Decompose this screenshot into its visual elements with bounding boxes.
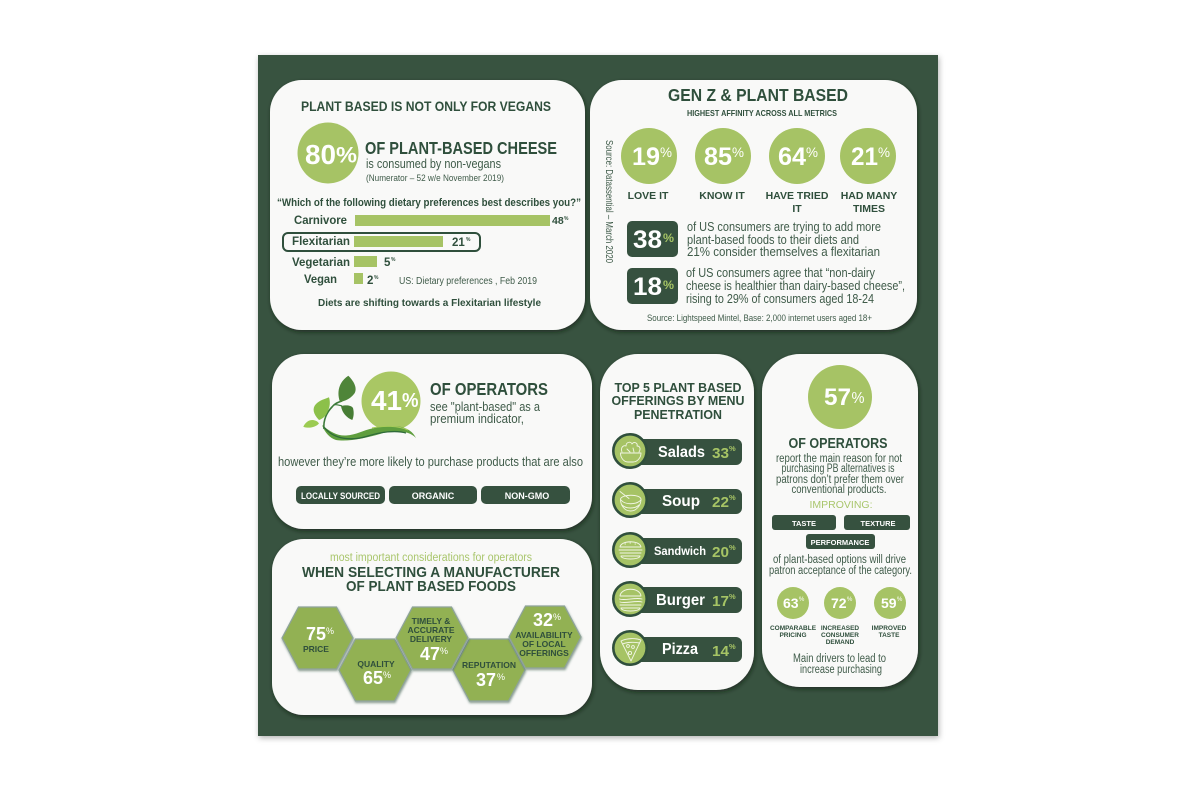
heading: gen z: GEN Z & PLANT BASED	[668, 85, 848, 105]
tag: non-gmo	[481, 486, 570, 504]
row: pizza: %	[729, 642, 736, 651]
bar chart: dietary preferences: 5	[384, 257, 391, 269]
bar chart: dietary preferences: Carnivore	[294, 213, 347, 227]
panel: top 5 offerings	[600, 354, 754, 690]
stat: had many times: %	[878, 144, 890, 160]
subheading: considerations: most important considerations for operators	[330, 552, 532, 564]
panel: 41% of operators	[272, 354, 592, 529]
bar chart: dietary preferences: %	[564, 216, 569, 222]
hexagon: availability: AVAILABILITY	[515, 630, 573, 640]
stat: know it: %	[732, 144, 744, 160]
text: patron acceptance: patron acceptance of the category.	[769, 565, 912, 577]
stat: comparable pricing: PRICING	[779, 632, 807, 639]
vertical source: Source: Datassential – March 2020	[603, 140, 614, 263]
stat: increased consumer demand: INCREASED	[821, 625, 859, 632]
text: patron acceptance	[769, 554, 912, 577]
heading: selecting a manufacturer: WHEN SELECTING A MANUFACTURER	[302, 564, 560, 581]
tag: organic	[389, 486, 477, 504]
heading: of operators: OF OPERATORS	[430, 379, 548, 399]
text: main drivers	[793, 653, 886, 676]
stat: know it	[695, 128, 751, 202]
dark green board	[258, 55, 938, 736]
stat circle: 57%: %	[852, 390, 864, 407]
text: patron acceptance: of plant-based options will drive	[773, 554, 906, 566]
stat: increased consumer demand: 72	[831, 595, 847, 611]
row: sandwich: Sandwich	[654, 544, 706, 558]
tag: texture	[844, 515, 910, 530]
stat: comparable pricing: %	[799, 597, 805, 603]
stat circle: 41%: 41	[371, 385, 402, 416]
callout: 38%: of US consumers are trying to add more	[687, 220, 881, 234]
row: sandwich: %	[729, 543, 736, 552]
callout: 38%: plant-based foods to their diets and	[687, 233, 859, 247]
bar chart: dietary preferences: Vegan	[304, 272, 337, 286]
label: improving: IMPROVING:	[809, 499, 873, 511]
callout: 38%: %	[663, 231, 674, 245]
row: burger: Burger	[656, 592, 705, 609]
text: main reason: conventional products.	[792, 484, 886, 496]
row: salads: 33	[712, 445, 729, 462]
row: sandwich	[613, 533, 742, 567]
callout: 38%: 21% consider themselves a flexitarian	[687, 245, 880, 259]
heading: top 5: OFFERINGS BY MENU	[612, 393, 744, 408]
bar chart: dietary preferences: 2	[367, 275, 373, 287]
stat: improved taste: IMPROVED	[872, 625, 907, 632]
row: soup	[613, 483, 742, 517]
icon: pizza slice	[621, 639, 641, 661]
text: premium indicator: see "plant-based" as a	[430, 400, 540, 414]
tag: locally sourced	[296, 486, 385, 504]
tag: organic: ORGANIC	[412, 491, 455, 501]
stat: increased consumer demand: %	[847, 597, 853, 603]
bar chart: dietary preferences: 48	[552, 215, 564, 227]
heading: top 5: TOP 5 PLANT BASED	[614, 380, 742, 395]
text: premium indicator	[430, 400, 540, 426]
stat: improved taste: %	[897, 597, 903, 603]
heading: of operators: OF OPERATORS	[788, 436, 888, 452]
hexagon: delivery: TIMELY &	[412, 616, 450, 626]
hexagon: availability: 32	[533, 610, 553, 630]
top leaf	[338, 376, 356, 402]
stat: increased consumer demand: CONSUMER	[821, 632, 859, 639]
hexagon: reputation: %	[497, 672, 505, 682]
bar chart: dietary preferences: Flexitarian	[292, 234, 350, 248]
hexagon: reputation: REPUTATION	[462, 660, 516, 670]
takeaway: Diets are shifting towards a Flexitarian lifestyle	[318, 297, 541, 309]
panel: 57% of operators	[762, 354, 918, 687]
stat: comparable pricing: 63	[783, 595, 799, 611]
tag: taste: TASTE	[792, 519, 816, 528]
callout: 18%: rising to 29% of consumers aged 18-24	[686, 292, 874, 306]
hexagon: price: %	[326, 626, 334, 636]
row: salads	[613, 434, 742, 468]
text: premium indicator: premium indicator,	[430, 412, 524, 426]
hexagon: delivery: DELIVERY	[410, 634, 452, 644]
row: burger: 17	[712, 593, 729, 610]
row: burger: %	[729, 592, 736, 601]
small leaf	[303, 420, 319, 428]
stat: improved taste: TASTE	[879, 632, 900, 639]
stat: know it: KNOW IT	[699, 190, 745, 202]
icon: leaves and swoosh	[303, 376, 416, 441]
text: plant-based cheese stat: (Numerator – 52 w/e November 2019)	[366, 173, 504, 184]
hexagon: delivery: 47	[420, 644, 440, 664]
text: main reason	[776, 453, 904, 496]
stat: comparable pricing: COMPARABLE	[770, 625, 817, 632]
stat: had many times: HAD MANY	[841, 190, 897, 202]
heading: selecting a manufacturer	[302, 564, 560, 595]
stat: had many times: TIMES	[853, 203, 885, 215]
subheading: HIGHEST AFFINITY ACROSS ALL METRICS	[687, 108, 837, 118]
hexagon: reputation	[453, 639, 525, 701]
chart source: US: Dietary preferences , Feb 2019	[399, 276, 537, 287]
hexagon: availability: OF LOCAL	[522, 639, 566, 649]
hexagon: availability: %	[553, 612, 561, 622]
text: main drivers: Main drivers to lead to	[793, 653, 886, 665]
stat: increased consumer demand	[821, 587, 859, 646]
icon: burger	[620, 589, 642, 611]
bar chart: dietary preferences	[283, 213, 569, 287]
heading: selecting a manufacturer: OF PLANT BASED FOODS	[346, 578, 516, 595]
survey question: “Which of the following dietary preferences best describes you?”	[277, 197, 581, 209]
row: burger	[613, 582, 742, 616]
tag: performance: PERFORMANCE	[811, 538, 869, 547]
text: main reason: patrons don’t prefer them over	[776, 474, 904, 486]
hexagon: price: 75	[306, 624, 326, 644]
stat: love it	[621, 128, 677, 202]
callout: 18%: %	[663, 278, 674, 292]
stat circle: 57%	[808, 365, 872, 429]
row: pizza: Pizza	[662, 641, 698, 658]
hexagon: delivery: %	[440, 646, 448, 656]
panel: plant based is not only for vegans	[270, 80, 585, 330]
stat: have tried it: IT	[792, 203, 802, 215]
hexagon: quality: 65	[363, 668, 383, 688]
callout: 18%: cheese is healthier than dairy-based cheese”,	[686, 279, 905, 293]
hexagon: price: PRICE	[303, 644, 329, 654]
hexagon: quality: %	[383, 670, 391, 680]
bar chart: dietary preferences: 21	[452, 237, 465, 249]
text: plant-based cheese stat	[365, 138, 557, 184]
row: soup: Soup	[662, 493, 700, 510]
stat: love it: LOVE IT	[628, 190, 669, 202]
tag: texture: TEXTURE	[860, 519, 896, 528]
tag: non-gmo: NON-GMO	[505, 491, 549, 501]
tag: taste	[772, 515, 836, 530]
stat circle: 80%: %	[336, 142, 357, 168]
stat circle: 41%: %	[402, 390, 419, 412]
stat: had many times	[840, 128, 897, 215]
bar chart: dietary preferences: %	[374, 275, 379, 281]
hexagon: delivery: ACCURATE	[407, 625, 455, 635]
tag: locally sourced: LOCALLY SOURCED	[301, 491, 380, 501]
stat circle: 41%	[362, 372, 420, 430]
bar chart: dietary preferences: %	[466, 237, 471, 243]
hexagon: quality: QUALITY	[357, 659, 395, 669]
stat: have tried it: 64	[778, 143, 806, 171]
stat: improved taste: 59	[881, 595, 897, 611]
callout: 18%: 18	[633, 273, 662, 301]
stat: have tried it: HAVE TRIED	[766, 190, 829, 202]
hexagon: price	[282, 607, 353, 669]
stat: comparable pricing	[770, 587, 817, 639]
left leaf	[314, 397, 330, 420]
callout: 18%	[627, 266, 905, 306]
heading: top 5: PENETRATION	[634, 407, 722, 422]
panel: manufacturer considerations	[272, 539, 592, 715]
icon: sandwich	[619, 542, 642, 559]
callout: 38%	[627, 220, 881, 259]
text: main reason: report the main reason for not	[776, 453, 903, 465]
stat circle: 57%: 57	[824, 384, 851, 411]
stat: have tried it	[766, 128, 829, 215]
hexagon: availability	[509, 606, 581, 668]
hexagon: reputation: 37	[476, 670, 496, 690]
panel: gen z and plant based	[590, 80, 917, 330]
stat: love it: 19	[632, 143, 660, 171]
row: soup: 22	[712, 494, 729, 511]
text: main drivers: increase purchasing	[800, 664, 882, 676]
hexagon: availability: OFFERINGS	[519, 648, 569, 658]
callout: 18%: of US consumers agree that “non-dairy	[686, 266, 876, 280]
stat: know it: 85	[704, 143, 732, 171]
hexagon: delivery	[396, 607, 468, 669]
stat: love it: %	[660, 144, 672, 160]
stat: improved taste	[872, 587, 907, 639]
source: Source: Lightspeed Mintel, Base: 2,000 internet users aged 18+	[647, 313, 872, 324]
text: main reason: purchasing PB alternatives is	[782, 463, 895, 475]
row: pizza: 14	[712, 643, 730, 660]
stat circle: 80%	[298, 122, 358, 184]
hexagon: quality	[339, 639, 411, 701]
bar chart: dietary preferences: Vegetarian	[292, 255, 350, 269]
callout: 38%: 38	[633, 226, 662, 254]
stat: have tried it: %	[806, 144, 818, 160]
heading: vegans: PLANT BASED IS NOT ONLY FOR VEGANS	[301, 99, 551, 114]
row: salads: %	[729, 444, 736, 453]
tag: performance	[806, 534, 875, 549]
row: salads: Salads	[658, 444, 705, 461]
stat: had many times: 21	[851, 143, 878, 171]
row: sandwich: 20	[712, 544, 729, 561]
text: plant-based cheese stat: is consumed by non-vegans	[366, 157, 501, 171]
icon: salad bowl	[620, 442, 641, 462]
right leaf	[341, 405, 354, 420]
text: plant-based cheese stat: OF PLANT-BASED CHEESE	[365, 138, 557, 158]
heading: top 5	[612, 380, 744, 422]
icon: soup bowl	[620, 492, 641, 511]
stat: increased consumer demand: DEMAND	[826, 639, 855, 646]
bar chart: dietary preferences: %	[391, 257, 396, 263]
row: soup: %	[729, 493, 736, 502]
text: purchase note: however they’re more likely to purchase products that are also	[278, 455, 583, 469]
stat circle: 80%: 80	[305, 139, 336, 170]
row: pizza	[613, 631, 742, 665]
